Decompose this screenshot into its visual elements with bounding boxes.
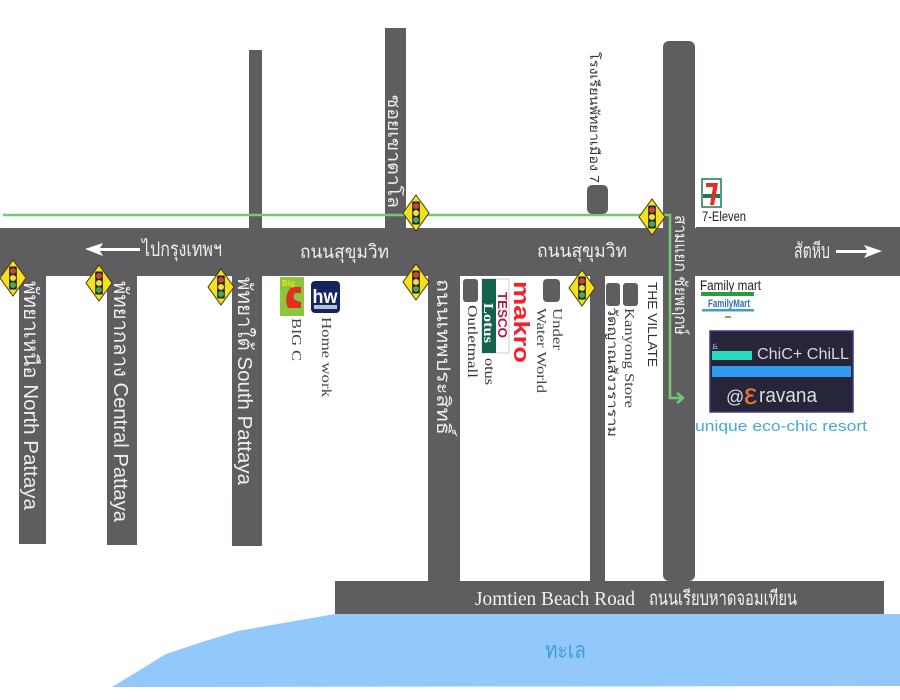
beach road label: ถนนเรียบหาดจอมเทียน	[649, 588, 797, 610]
green route	[3, 215, 683, 403]
sea label: ทะเล	[545, 637, 586, 663]
makro: makro	[509, 281, 534, 363]
Outlet mall	[463, 279, 479, 378]
road label: to Bangkok: ไปกรุงเทพฯ	[140, 238, 222, 262]
Big C	[280, 277, 304, 361]
resort logo: ε	[744, 378, 757, 411]
Tesco Lotus: TESCO	[495, 292, 510, 338]
resort logo: @	[726, 387, 744, 407]
resort logo	[710, 331, 853, 412]
vertical road labels: พัทยาใต้ South Pattaya	[233, 277, 256, 486]
Wat	[605, 283, 620, 437]
beach road label: Jomtien Beach Road	[475, 588, 635, 610]
resort logo: ChiC+ ChiLL	[757, 346, 849, 363]
Wat: วัดญาณสังวราราม	[605, 307, 620, 437]
vertical road labels: พัทยาเหนือ North Pattaya	[19, 281, 41, 511]
Under Water World: Water World	[533, 308, 548, 393]
vertical road labels: ถนนเทพประสิทธิ์	[432, 279, 458, 437]
Home work: hw	[312, 287, 338, 308]
Kanyong Store: Kanyong Store	[621, 308, 636, 408]
Tesco Lotus: otus	[481, 358, 496, 385]
road label: Sukhumvit left: ถนนสุขุมวิท	[300, 242, 389, 264]
resort logo: ravana	[759, 385, 818, 407]
road label: Sattahip	[794, 240, 882, 263]
Family mart	[700, 277, 761, 318]
Under Water World	[533, 279, 564, 393]
Family mart: Family mart	[700, 277, 761, 293]
7-Eleven	[702, 179, 746, 224]
vertical road labels	[19, 95, 690, 523]
Home work	[311, 281, 340, 397]
7-Eleven: 7-Eleven	[702, 208, 746, 224]
school	[587, 52, 608, 214]
traffic lights	[0, 195, 665, 306]
road label: Sukhumvit right: ถนนสุขุมวิท	[537, 241, 627, 263]
sea	[112, 614, 900, 687]
road label: Sattahip: สัตหีบ	[794, 240, 830, 263]
school: โรงเรียนพัทยาเมือง 7	[587, 52, 602, 183]
vertical road labels: สามแยก ชัยพฤกษ์	[671, 215, 690, 335]
Outlet mall: Outletmall	[464, 305, 479, 378]
Home work: Home work	[318, 317, 333, 397]
resort logo: 丘	[712, 344, 718, 351]
tagline: unique eco-chic resort	[695, 418, 868, 435]
Big C: BIG C	[288, 318, 303, 361]
Under Water World: Under	[549, 308, 564, 350]
vertical road labels: ซอยเขาตาโล	[384, 95, 405, 208]
vertical road labels: พัทยากลาง Central Pattaya	[109, 281, 131, 523]
Kanyong Store	[621, 283, 638, 408]
Tesco Lotus: Lotus	[480, 303, 495, 344]
Tesco Lotus	[480, 279, 510, 385]
Family mart: FamilyMart	[708, 298, 750, 310]
The Villate: THE VILLATE	[645, 282, 660, 367]
road label: to Bangkok	[85, 238, 222, 262]
beach road label	[475, 588, 797, 610]
Big C: Big	[282, 279, 295, 288]
